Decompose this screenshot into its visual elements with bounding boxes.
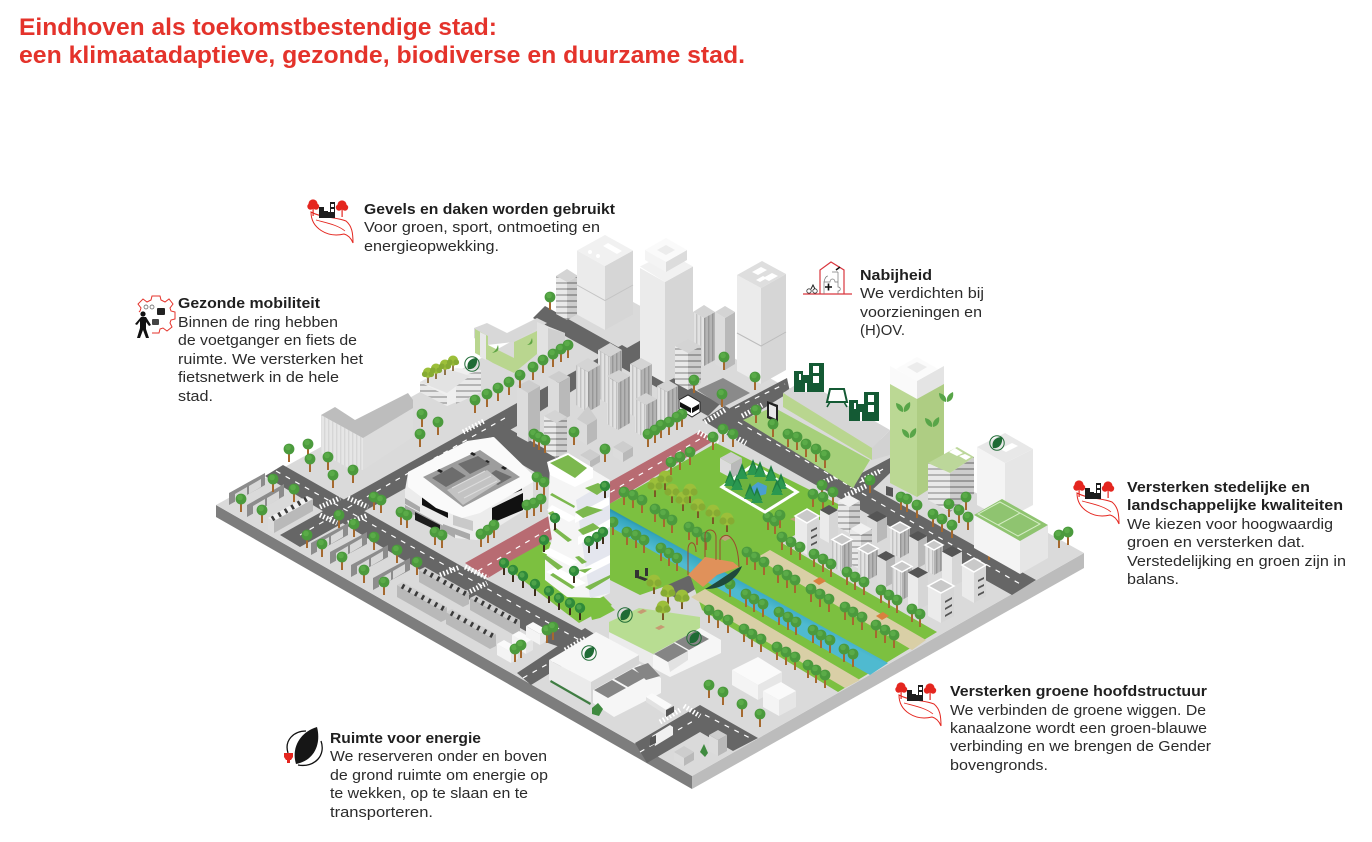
downtown tower cluster <box>517 238 786 468</box>
body text: bovengronds. <box>950 758 1048 774</box>
body text <box>950 703 1211 774</box>
icon: city on a leaf <box>307 199 353 243</box>
heading: Versterken groene hoofdstructuur <box>950 684 1207 700</box>
title: Eindhoven als toekomstbestendige stad: <box>19 14 497 41</box>
townhouse stack 3 <box>470 595 520 635</box>
body text: We reserveren onder en boven <box>330 749 547 765</box>
townhouse stack 1 <box>419 567 469 607</box>
vertical forest tower <box>539 453 610 598</box>
stadium <box>405 437 533 540</box>
dense grey apartment cluster <box>795 495 986 623</box>
body text: stad. <box>178 389 213 405</box>
body text <box>178 315 363 405</box>
townhouse stack 2 <box>397 582 447 622</box>
trees: canal banks and linear park <box>608 504 925 688</box>
bridge <box>688 530 742 589</box>
station with green facade <box>783 363 890 460</box>
title: een klimaatadaptieve, gezonde, biodiverse en duurzame stad. <box>19 42 745 69</box>
long apartment block <box>321 393 413 470</box>
billboards <box>767 401 893 497</box>
benches on sand path <box>813 577 889 620</box>
striped green-roof building <box>928 447 974 512</box>
trees: foreground <box>430 472 765 727</box>
icon: leaf with plug <box>284 727 322 765</box>
body text: Voor groen, sport, ontmoeting en <box>364 220 600 236</box>
small park house <box>720 452 742 478</box>
body text: energieopwekking. <box>364 239 499 255</box>
body text: de grond ruimte om energie op <box>330 768 548 784</box>
station lawn <box>743 407 870 488</box>
row 2 <box>247 484 284 517</box>
heading: landschappelijke kwaliteiten <box>1127 498 1343 514</box>
icon: city on a leaf <box>1073 480 1119 524</box>
callout: nabijheid <box>803 262 984 339</box>
body text: Binnen de ring hebben <box>178 315 338 331</box>
callout: ruimte voor energie <box>284 727 548 821</box>
body text: verbinding en we brengen de Gender <box>950 739 1211 755</box>
body text: We verdichten bij <box>860 286 984 302</box>
body text: fietsnetwerk in de hele <box>178 370 339 386</box>
heading <box>1127 480 1343 514</box>
body text: Verstedelijking en groen zijn in <box>1127 554 1346 570</box>
isometric city illustration <box>216 235 1084 789</box>
park: orchard, square, paths <box>619 447 838 541</box>
forest square with pond <box>722 459 797 512</box>
green facade building <box>474 318 565 373</box>
row 1 <box>229 473 265 505</box>
body text <box>330 749 548 821</box>
row houses block left <box>229 473 313 533</box>
warehouse with green roof garden <box>609 575 721 677</box>
small white houses and trees <box>497 622 558 663</box>
body text: transporteren. <box>330 805 433 821</box>
row 3 with roofs <box>268 496 313 533</box>
townhouse stack 4 <box>446 609 496 649</box>
body text: (H)OV. <box>860 323 905 339</box>
people and fitness equipment in park <box>635 568 648 581</box>
trees: patch at foot of tower <box>499 558 585 620</box>
trees: back streets <box>284 292 760 488</box>
callout: groene hoofdstructuur <box>895 682 1211 774</box>
bus <box>679 395 700 417</box>
back buildings row <box>556 235 633 330</box>
trees: right side <box>708 405 1073 560</box>
plaza, parked cars <box>697 378 750 407</box>
road network <box>265 306 1036 763</box>
icon: train <box>827 389 847 407</box>
body text <box>364 220 600 255</box>
callout: gezonde mobiliteit <box>135 296 363 405</box>
icon: house with puzzle <box>803 262 852 294</box>
sand path upper <box>756 550 926 650</box>
platform base <box>216 288 1084 789</box>
body text: te wekken, op te slaan en te <box>330 786 528 802</box>
heading: Nabijheid <box>860 268 932 284</box>
gate buildings <box>674 730 727 766</box>
body text: ruimte. We versterken het <box>178 352 363 368</box>
heading: Versterken stedelijke en <box>1127 480 1310 496</box>
body text: kanaalzone wordt een groen-blauwe <box>950 721 1207 737</box>
body text <box>860 286 984 339</box>
green park and linear park ground <box>503 443 937 692</box>
green tower with leaves <box>890 357 953 497</box>
title <box>19 14 745 69</box>
heading: Gezonde mobiliteit <box>178 296 320 312</box>
body text <box>1127 517 1346 588</box>
icon: dark green buildings right <box>849 392 879 421</box>
heading: Gevels en daken worden gebruikt <box>364 202 615 218</box>
delivery trucks <box>646 693 674 746</box>
body text: voorzieningen en <box>860 305 982 321</box>
body text: We verbinden de groene wiggen. De <box>950 703 1206 719</box>
callout: gevels en daken <box>307 199 615 255</box>
body text: de voetganger en fiets de <box>178 333 357 349</box>
sand path lower <box>691 589 860 688</box>
icon: gear with pedestrian and transport <box>135 296 175 338</box>
white tower with leaf icon <box>977 433 1033 520</box>
callout: stedelijke en landschappelijke kwaliteiten <box>1073 480 1346 588</box>
white office blocks <box>732 657 796 716</box>
sports hall with green roof pitch <box>974 499 1048 574</box>
body text: We kiezen voor hoogwaardig <box>1127 517 1333 533</box>
body text: balans. <box>1127 572 1179 588</box>
warehouse with solar roof <box>549 632 661 717</box>
body text: groen en versterken dat. <box>1127 535 1305 551</box>
canal <box>607 507 888 675</box>
row houses block centre-left <box>302 492 520 649</box>
planter building with leaf icon <box>420 355 481 406</box>
icon: dark green buildings left <box>794 363 824 392</box>
icon: city on a leaf <box>895 682 941 726</box>
heading: Ruimte voor energie <box>330 731 481 747</box>
